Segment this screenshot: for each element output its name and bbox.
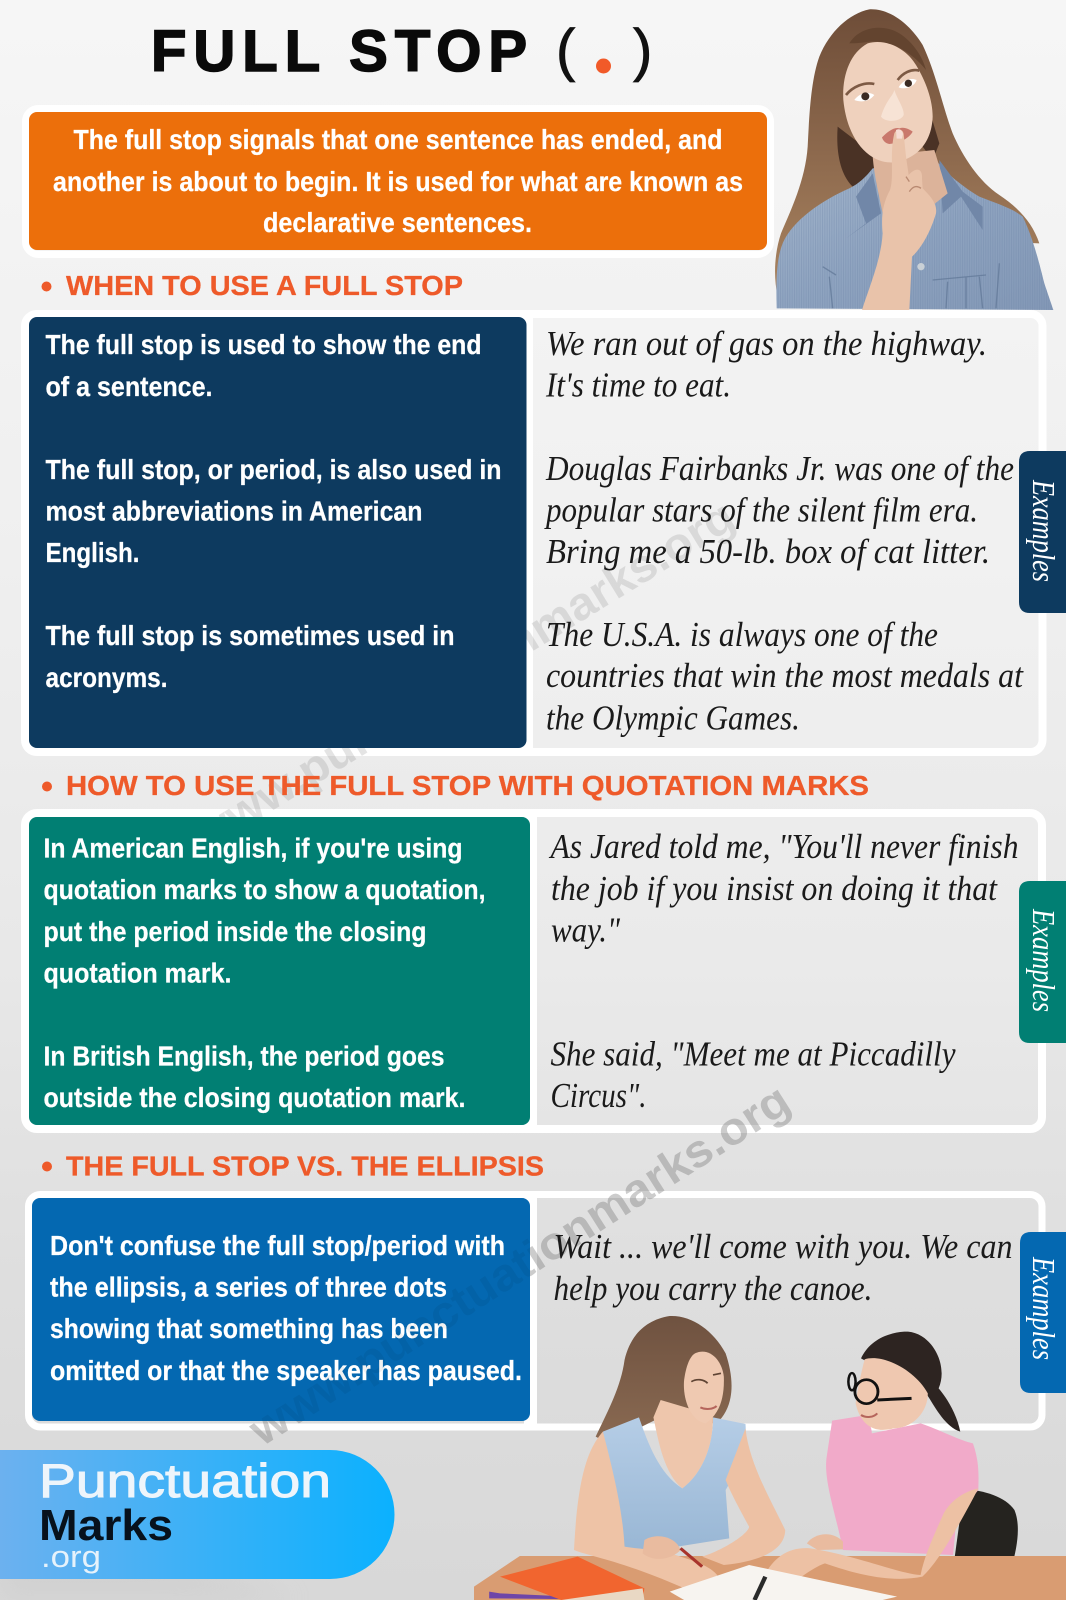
panel frame: ellipsis	[28, 1194, 1042, 1427]
panel: when to use rules: The full stop is used to show the end	[46, 329, 482, 360]
panel: quotation marks rules: In American English, if you're using	[44, 832, 462, 864]
examples: quotation marks	[549, 827, 1018, 1115]
watermark: faint trace over dark panels: www.punctuationmarks.org	[239, 1073, 799, 1456]
photo: thinking woman	[775, 9, 1053, 310]
panel: when to use rules: The full stop, or period, is also used in	[46, 454, 502, 485]
panel: intro definition: The full stop signals that one sentence has ended, and	[74, 124, 722, 155]
panel: ellipsis rule: the ellipsis, a series of three dots	[50, 1272, 447, 1302]
panel: quotation marks rules: In British English, the period goes	[44, 1040, 444, 1072]
heading: when to use: WHEN TO USE A FULL STOP	[66, 270, 463, 301]
tab: examples teal: Examples	[1026, 908, 1062, 1012]
examples: when to use	[543, 324, 1024, 738]
logo: Punctuation Marks .org: Marks	[39, 1501, 173, 1550]
panel: when to use rules	[29, 317, 526, 748]
panel frame: when to use	[25, 314, 1042, 752]
examples: when to use: The U.S.A. is always one of the	[546, 615, 938, 654]
right woman	[763, 1332, 979, 1590]
panel: ellipsis rule: showing that something has been	[50, 1313, 448, 1344]
paper sheet and pen	[670, 1565, 897, 1600]
tab: examples navy: Examples	[1026, 479, 1062, 582]
desk	[474, 1556, 1066, 1600]
heading: ellipsis: THE FULL STOP VS. THE ELLIPSIS	[66, 1150, 544, 1182]
title: (	[556, 18, 575, 83]
panel: quotation marks rules: put the period inside the closing	[44, 916, 426, 947]
examples: quotation marks: way."	[551, 910, 620, 950]
panel: intro definition	[26, 108, 770, 254]
examples: quotation marks: the job if you insist on doing it that	[551, 869, 998, 908]
title: )	[633, 18, 652, 83]
panel: quotation marks rules: quotation mark.	[44, 958, 232, 988]
examples: when to use: It's time to eat.	[545, 366, 731, 404]
title: FULL STOP	[151, 19, 527, 84]
examples: ellipsis: Wait ... we'll come with you. We can	[554, 1227, 1012, 1266]
panel: quotation marks rules	[29, 817, 530, 1125]
examples: when to use: popular stars of the silent film era.	[543, 490, 978, 530]
logo: Punctuation Marks .org: .org	[41, 1539, 101, 1574]
logo: Punctuation Marks .org: Punctuation	[39, 1454, 331, 1507]
panel: quotation marks rules: outside the closing quotation mark.	[44, 1082, 466, 1113]
examples: ellipsis: help you carry the canoe.	[554, 1269, 872, 1308]
tab: examples navy	[1019, 451, 1066, 613]
panel: when to use rules: most abbreviations in American	[46, 496, 422, 526]
examples: when to use: the Olympic Games.	[546, 698, 800, 738]
examples: when to use: countries that win the most medals at	[546, 656, 1024, 695]
watermark: lower: www.punctuationmarks.org	[239, 1073, 799, 1456]
panel: quotation marks rules: quotation marks to show a quotation,	[44, 874, 486, 905]
heading: quotation marks: HOW TO USE THE FULL STOP WITH QUOTATION MARKS	[66, 770, 869, 801]
orange book	[489, 1557, 644, 1600]
tab: examples blue	[1020, 1232, 1066, 1393]
examples: when to use: We ran out of gas on the highway.	[546, 324, 987, 363]
examples: when to use: Douglas Fairbanks Jr. was one of the	[545, 449, 1014, 488]
panel: when to use rules: acronyms.	[46, 662, 168, 693]
panel: intro definition: declarative sentences.	[263, 207, 532, 238]
examples: ellipsis	[554, 1227, 1012, 1308]
examples: quotation marks: She said, "Meet me at Piccadilly	[550, 1034, 956, 1074]
panel: when to use rules: The full stop is sometimes used in	[46, 620, 454, 651]
panel: intro definition: another is about to begin. It is used for what are known as	[53, 166, 743, 197]
panel: when to use rules: of a sentence.	[46, 371, 212, 402]
tab: examples blue: Examples	[1026, 1256, 1062, 1360]
watermark: upper: www.punctuationmarks.org	[182, 490, 743, 861]
panel: ellipsis rule	[32, 1198, 530, 1421]
panel frame: quotation marks	[25, 813, 1042, 1129]
chair	[955, 1489, 1018, 1556]
photo: two women at a desk	[474, 1316, 1066, 1600]
examples: when to use: Bring me a 50-lb. box of cat litter.	[546, 532, 990, 571]
panel: when to use rules: English.	[46, 537, 140, 568]
examples: quotation marks: Circus".	[550, 1076, 646, 1115]
panel: ellipsis rule: Don't confuse the full stop/period with	[50, 1230, 505, 1261]
logo: Punctuation Marks .org	[0, 1450, 394, 1579]
panel: ellipsis rule: omitted or that the speaker has paused.	[50, 1355, 522, 1386]
tab: examples teal	[1019, 881, 1066, 1043]
left woman	[574, 1316, 785, 1593]
examples: quotation marks: As Jared told me, "You'll never finish	[549, 827, 1018, 866]
